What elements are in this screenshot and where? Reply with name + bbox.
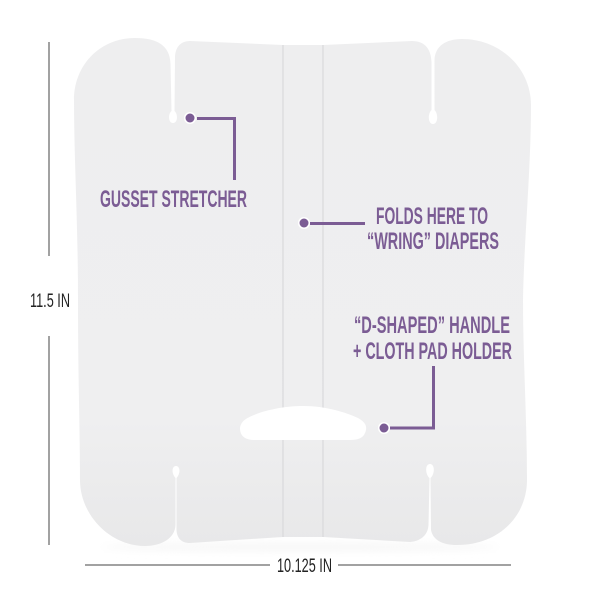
callout: gusset stretcher: [100, 112, 247, 213]
right fold line: [322, 45, 324, 537]
callout: folds here: FOLDS HERE TO: [376, 203, 488, 230]
diaper sprayer shield board: [74, 38, 531, 551]
callout: folds here: [298, 203, 499, 255]
vertical dimension: 11.5 in: 11.5 IN: [30, 291, 70, 312]
left fold line: [282, 45, 284, 537]
callout: gusset stretcher: GUSSET STRETCHER: [100, 186, 247, 213]
handle cutout: [240, 406, 366, 440]
board outline: [74, 38, 531, 546]
soft floor shadow: [100, 543, 500, 551]
callout: folds here: “WRING” DIAPERS: [367, 228, 499, 255]
horizontal dimension: 10.125 in: 10.125 IN: [277, 556, 332, 577]
callout: D-shaped handle: [353, 312, 512, 434]
